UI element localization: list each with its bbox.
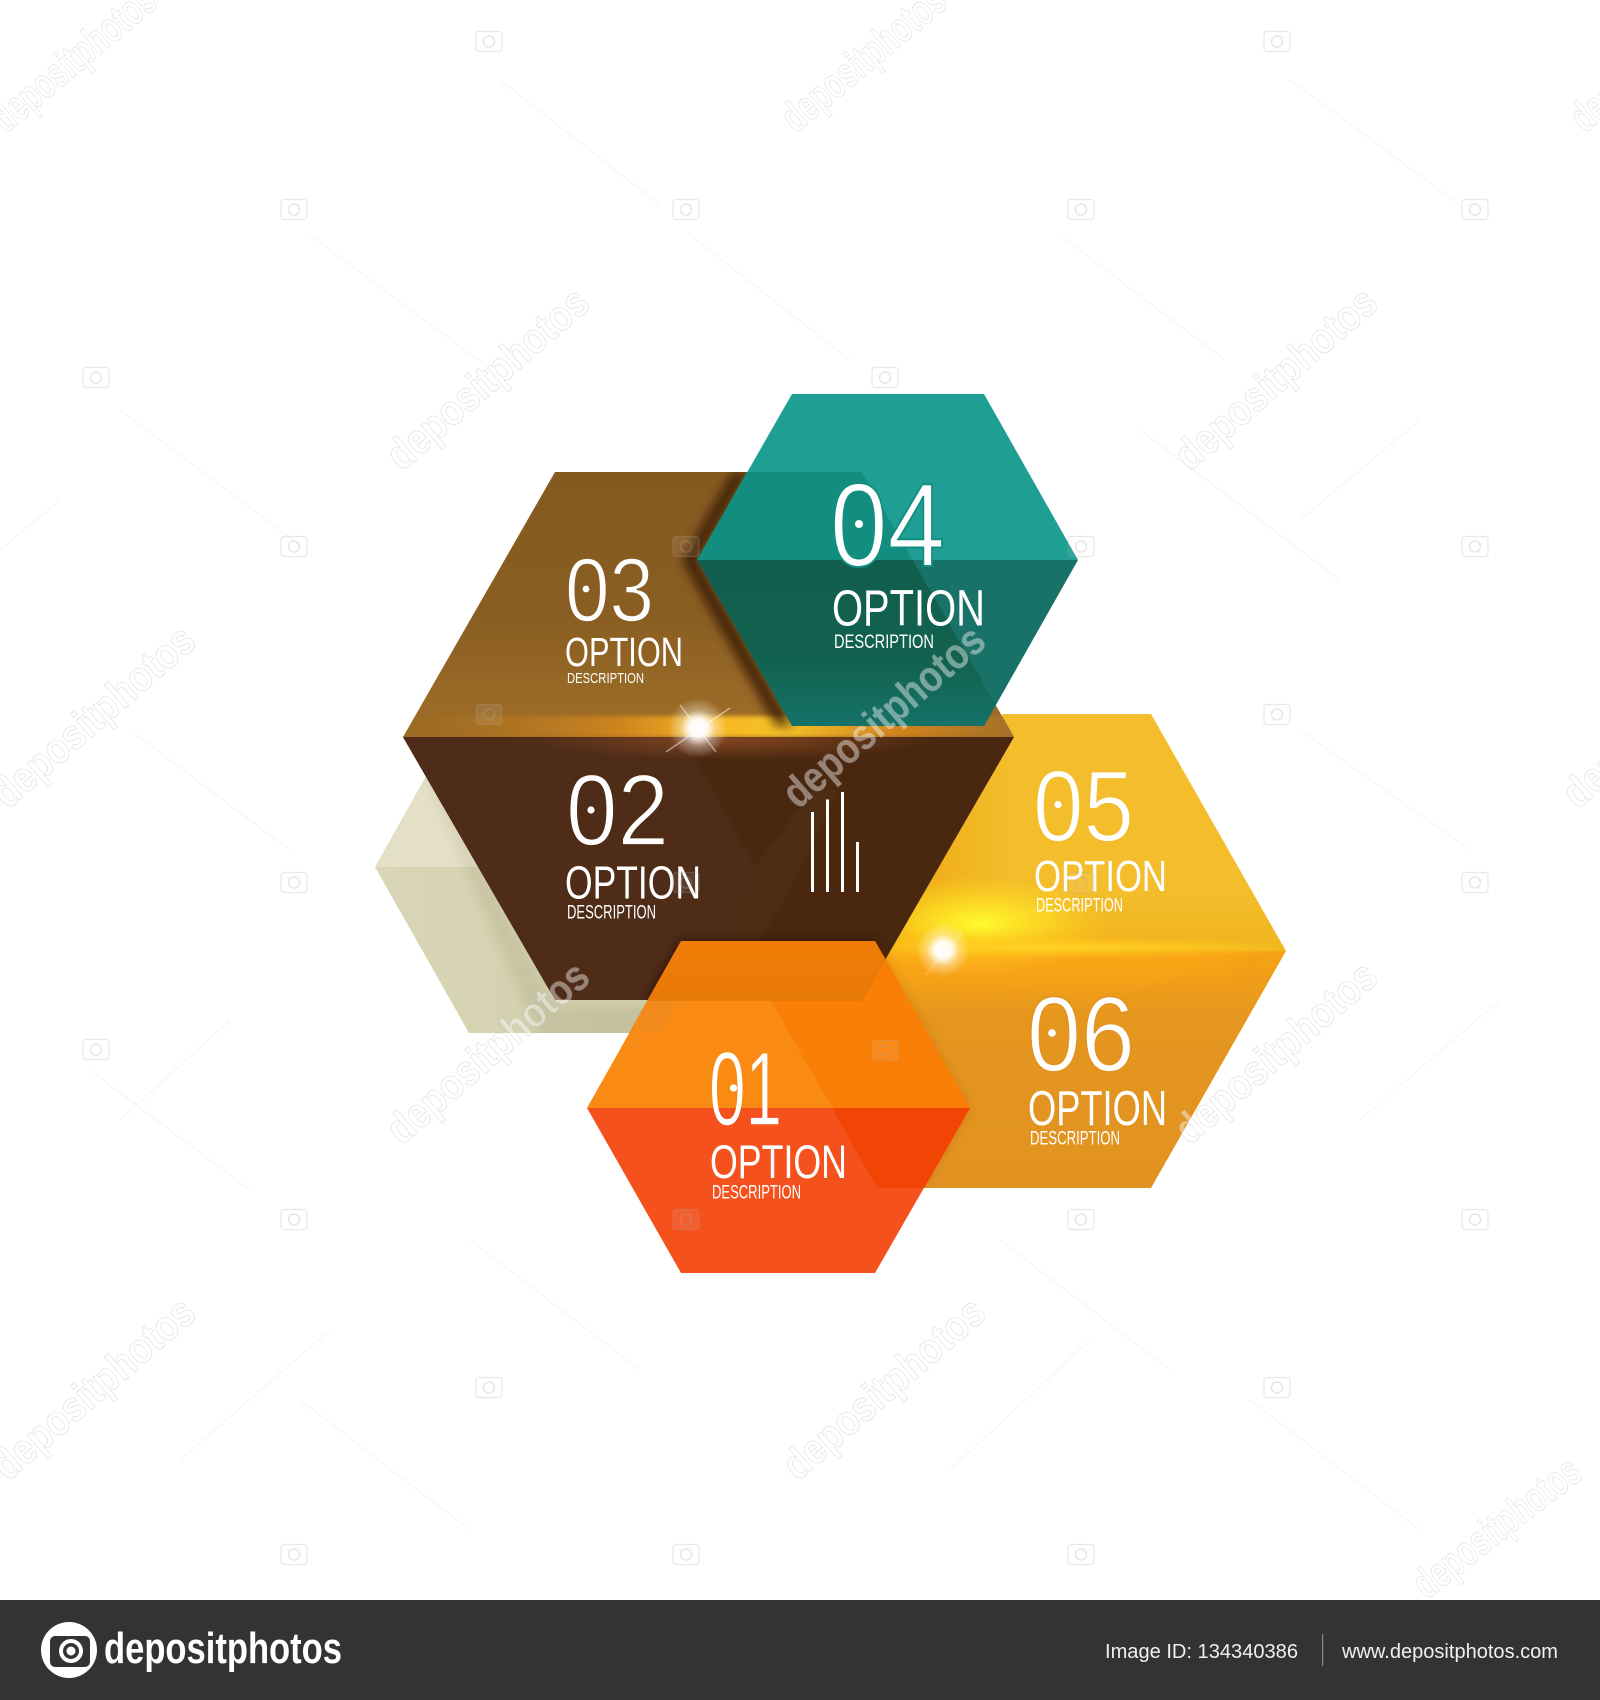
text block: option 04: DESCRIPTION <box>834 632 934 653</box>
watermark: repeated depositphotos text: depositphotos <box>1165 952 1387 1154</box>
icon: bar chart lines <box>811 792 859 892</box>
watermark: repeated depositphotos text: depositphotos <box>377 278 599 480</box>
text block: option 06 <box>1027 974 1167 1150</box>
footer brand name: depositphotos <box>104 1624 342 1673</box>
text block: option 05 <box>1033 751 1167 916</box>
panel: option 05 and 06 yellow hexagon <box>886 714 1286 1188</box>
text block: option 05: OPTION <box>1034 852 1167 901</box>
text block: option 06: 06 <box>1027 974 1135 1094</box>
text block: option 02: 02 <box>566 755 669 867</box>
icon: sparkle on yellow hexagon <box>916 923 970 977</box>
text block: option 02: OPTION <box>565 856 701 908</box>
text block: option 05: DESCRIPTION <box>1036 896 1123 916</box>
watermark: repeated depositphotos text: depositphotos <box>773 1288 995 1490</box>
text block: option 03: 03 <box>565 541 654 641</box>
text block: option 04: OPTION <box>832 580 985 636</box>
watermark: repeated depositphotos text: depositphotos <box>1165 278 1387 480</box>
panel: option 04 teal hexagon <box>697 394 1078 726</box>
text block: option 01: DESCRIPTION <box>712 1182 801 1204</box>
text block: option 06: DESCRIPTION <box>1030 1128 1120 1150</box>
icon: depositphotos camera logo <box>41 1622 97 1678</box>
text block: option 03: DESCRIPTION <box>567 671 644 687</box>
text block: option 02: DESCRIPTION <box>567 902 656 924</box>
text block: option 04 <box>830 459 985 653</box>
panel: beige hexagon behind <box>375 776 648 1033</box>
text block: option 01: OPTION <box>710 1135 847 1188</box>
footer image id: Image ID: 134340386 <box>1105 1641 1298 1663</box>
panel: option 03 brown upper half <box>403 472 1014 737</box>
text block: option 04: 04 <box>830 459 945 592</box>
text block: option 06: OPTION <box>1028 1082 1167 1136</box>
text block: option 01 <box>709 1031 847 1204</box>
panel: option 02 dark brown lower half <box>403 720 1014 1004</box>
footer bar <box>0 1600 1600 1700</box>
text block: option 03: OPTION <box>565 629 683 675</box>
text block: option 05: 05 <box>1033 751 1134 863</box>
panel: option 01 orange hexagon <box>587 941 970 1273</box>
watermark: repeated depositphotos text: depositphotos <box>377 952 599 1154</box>
icon: sparkle on brown hexagon <box>666 698 730 758</box>
watermark: camera icons <box>83 32 1488 1564</box>
text block: option 01: 01 <box>709 1031 782 1148</box>
text block: option 02 <box>565 755 701 924</box>
watermark: repeated depositphotos text: depositphotos <box>773 616 995 818</box>
footer website: www.depositphotos.com <box>1341 1641 1558 1663</box>
text block: option 03 <box>565 541 683 687</box>
